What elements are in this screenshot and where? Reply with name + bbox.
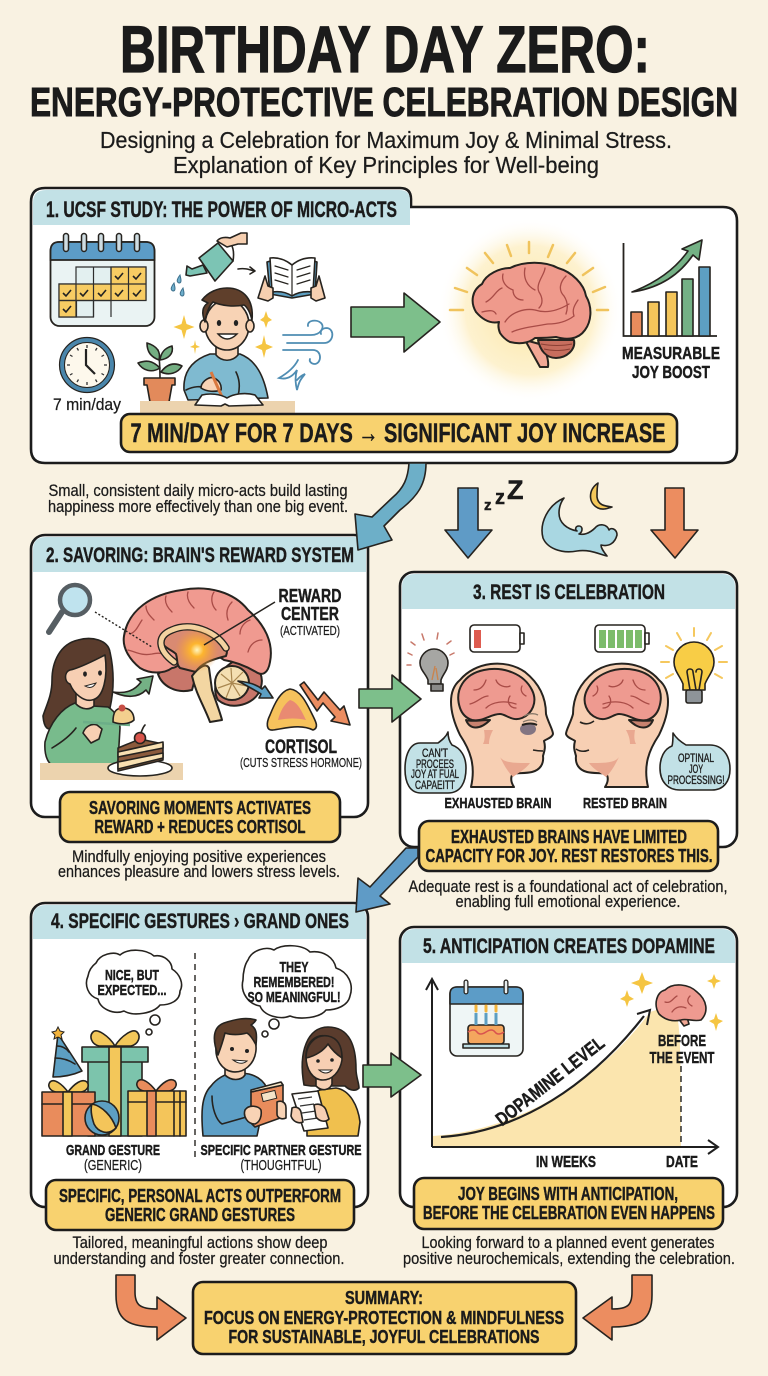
icon: brain cross-section [124,588,275,722]
summary box: FOCUS ON ENERGY-PROTECTION & MINDFULNESS [204,1307,564,1328]
heading 3: 3. REST IS CELEBRATION [473,581,665,604]
icon: amygdala [267,689,316,730]
caption 2: Mindfully enjoying positive experiences [72,848,326,866]
arrow: green to brain [351,293,440,352]
caption 1: happiness more effectively than one big event. [48,498,348,516]
callout 4: SPECIFIC, PERSONAL ACTS OUTPERFORM [59,1185,341,1206]
chart label: JOY BOOST [632,362,710,382]
icon: full battery [595,625,649,652]
speech bubble: rested [660,733,730,790]
callout 1 [121,414,677,452]
summary box: SUMMARY: [345,1287,423,1308]
label: specific gesture: (THOUGHTFUL) [240,1157,322,1174]
arrow: panel 2 to 3 [359,675,421,722]
label: cortisol: (CUTS STRESS HORMONE) [240,755,362,770]
panel: 3 rest [400,572,737,871]
icon: zzz: z [484,497,492,514]
label: grand gesture: GRAND GESTURE [66,1142,160,1159]
icon: wind [279,321,332,390]
label: before the event: THE EVENT [650,1050,715,1067]
icon: open notebook [195,394,263,406]
icon: zzz: z [495,487,505,509]
caption 3 [408,878,728,911]
icon: gifts [42,1027,186,1136]
caption 4 [54,1234,344,1268]
icon: zzz [484,475,524,514]
figure: exhausted head [451,664,553,787]
divider [194,953,196,1160]
callout 3 [419,821,718,871]
thought cloud: grand: NICE, BUT [105,967,159,984]
thought cloud: specific: SO MEANINGFUL! [248,989,340,1006]
label: dopamine level: DOPAMINE LEVEL [492,1033,609,1131]
panel: 2 savoring [31,535,368,842]
label: brain states: RESTED BRAIN [583,795,667,812]
caption 4: understanding and foster greater connection. [54,1250,344,1268]
label: before the event: BEFORE [658,1033,706,1050]
subtitle [100,127,672,178]
callout 4 [46,1180,354,1230]
panel: 1 UCSF study [31,188,737,463]
caption 3: enabling full emotional experience. [456,893,680,911]
caption 5 [403,1234,735,1268]
label: before the event [650,1033,715,1067]
arrow: panel 4 to 5 [363,1053,421,1097]
chart label [622,343,720,382]
label: brain states: EXHAUSTED BRAIN [444,795,552,812]
magnifier pointer [95,612,152,647]
figure: woman with note [291,1027,360,1136]
caption 1: Small, consistent daily micro-acts build lasting [48,482,348,500]
speech bubble: exhausted: CAPAEITT [415,780,455,792]
callout 2: SAVORING MOMENTS ACTIVATES [89,797,311,818]
chart label: MEASURABLE [622,343,720,363]
caption 5: Looking forward to a planned event generates [422,1234,714,1252]
icon: calendar [50,236,154,326]
arrow: blue down [445,488,492,558]
icon: low battery [470,625,524,652]
figure: woman eating cake [43,638,134,768]
label: grand gesture: (GENERIC) [84,1157,142,1174]
speech bubble: rested: JOY [689,764,703,776]
summary box [193,1282,576,1354]
heading 2: 2. SAVORING: BRAIN'S REWARD SYSTEM [46,544,354,567]
callout 2 [60,792,340,842]
icon: potted plant [138,343,182,402]
callout 5 [414,1178,723,1229]
icon: magnifier [49,585,90,632]
speech bubble: exhausted [405,732,466,793]
icon: moon and wave [542,483,617,556]
label: cortisol [240,736,362,770]
thought cloud: specific [242,946,351,1037]
icon: birthday calendar [450,982,523,1056]
clock label: 7 min/day [53,395,121,414]
icon: open book [258,258,325,301]
arrow: panel 1 to 2 [355,463,426,550]
caption 1 [48,482,348,516]
speech bubble: exhausted: PROCEES [416,759,454,771]
chart: dopamine curve [426,979,718,1154]
label: cortisol: CORTISOL [265,736,337,758]
icon: sparkles [174,311,273,358]
summary box: FOR SUSTAINABLE, JOYFUL CELEBRATIONS [228,1326,540,1347]
callout 5: JOY BEGINS WITH ANTICIPATION, [458,1183,678,1204]
icon: watering can [171,233,255,296]
callout 3: EXHAUSTED BRAINS HAVE LIMITED [451,826,687,847]
arrow: cerebellum to cortisol [238,681,273,698]
icon: clock [60,338,114,392]
caption 2 [58,848,340,881]
heading 4: 4. SPECIFIC GESTURES › GRAND ONES [51,910,349,933]
label: grand gesture [66,1142,160,1174]
figure: rested head [566,664,668,787]
desk [140,401,295,415]
caption 3: Adequate rest is a foundational act of celebration, [408,878,728,896]
caption 5: positive neurochemicals, extending the celebration. [403,1250,735,1268]
panel: 5 anticipation [400,927,737,1229]
icon: small brain [656,985,706,1026]
callout 2: REWARD + REDUCES CORTISOL [94,816,306,837]
caption 2: enhances pleasure and lowers stress levels. [58,863,340,881]
title [30,12,738,125]
label: specific gesture [200,1142,362,1174]
subtitle: Designing a Celebration for Maximum Joy & Minimal Stress. [100,127,672,153]
caption 4: Tailored, meaningful actions show deep [72,1234,328,1252]
panel: 4 gestures [31,903,368,1230]
thought cloud: specific: THEY [280,959,308,976]
callout 4: GENERIC GRAND GESTURES [105,1204,295,1225]
speech bubble: exhausted: JOY AT FUAL [411,769,459,781]
arrow: orange down [651,488,698,558]
icon: cake slice [108,725,172,776]
label: reward center: CENTER [281,603,339,624]
icon: zzz: Z [507,475,524,505]
icon: dim bulb [407,633,454,691]
icon: down lightning arrow [300,682,350,725]
icon: glowing brain [438,218,622,402]
thought cloud: specific: REMEMBERED! [254,974,334,991]
speech bubble: rested: OPTINAL [678,753,714,765]
figure: person writing [184,288,268,400]
label: date: DATE [666,1154,698,1171]
heading 1: 1. UCSF STUDY: THE POWER OF MICRO-ACTS [46,197,397,222]
arrow: panel 3 to 4 [356,848,418,912]
label: brain states [444,795,667,812]
label: reward center: REWARD [278,585,342,606]
subtitle: Explanation of Key Principles for Well-being [173,152,599,178]
figure: man with book [202,1019,286,1136]
label: specific gesture: SPECIFIC PARTNER GESTURE [200,1142,362,1159]
speech bubble: rested: PROCESSING! [668,775,724,787]
thought cloud: grand [86,950,182,1035]
table [40,763,183,780]
arrow: left to summary [116,1275,186,1340]
label: reward center: (ACTIVATED) [280,623,340,638]
label: reward center [278,585,342,638]
icon: bright bulb [661,628,727,703]
arrow: right to summary [583,1275,652,1340]
arrow: woman to brain [113,676,153,696]
chart: measurable joy boost [624,240,717,336]
label: in weeks: IN WEEKS [536,1154,596,1171]
speech bubble: exhausted: CAN'T [422,748,448,760]
icon: chart sparkles [620,972,723,1031]
thought cloud: grand: EXPECTED... [98,982,166,999]
